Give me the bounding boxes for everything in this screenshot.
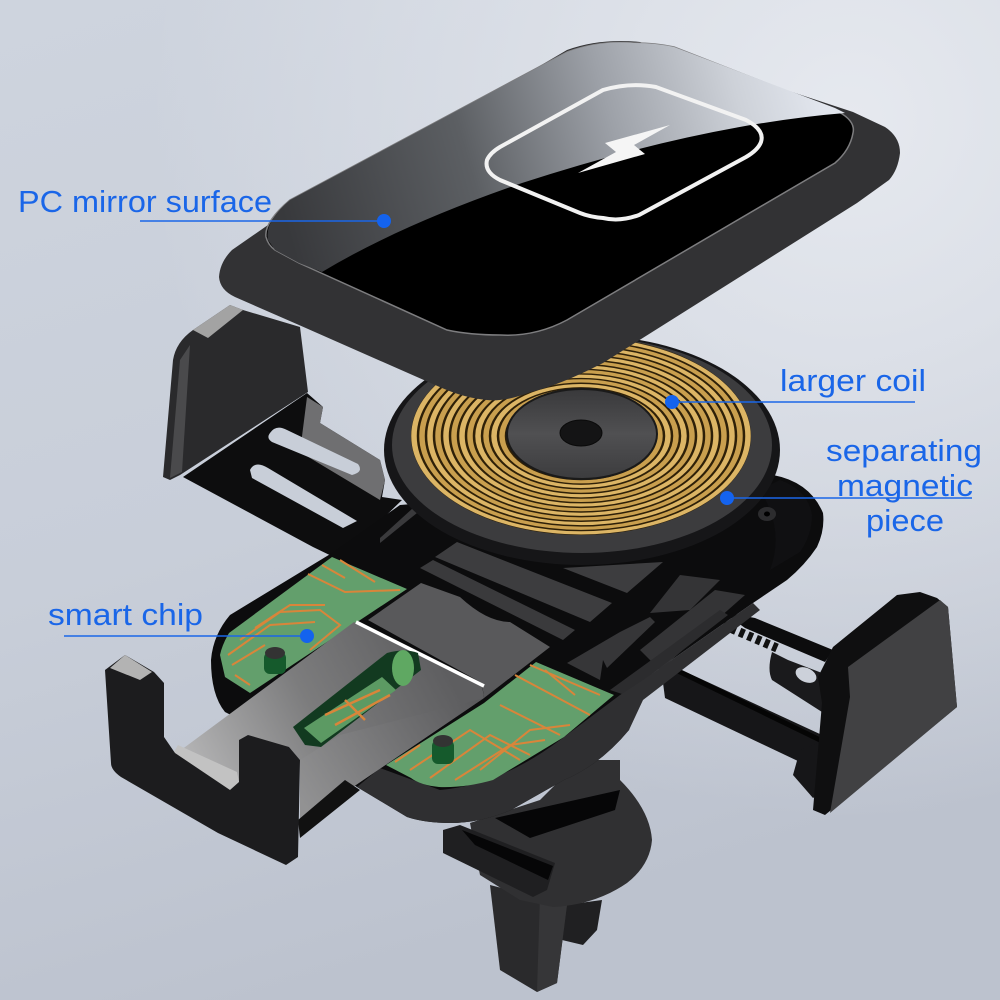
circuit board right <box>386 662 614 787</box>
label: larger coil <box>665 363 926 409</box>
copper coil <box>411 337 751 535</box>
label: larger coil: larger coil <box>780 363 926 398</box>
right clamp pad <box>813 592 957 815</box>
vent clip <box>443 760 652 992</box>
magnetic disk <box>384 335 780 565</box>
right clamp rails <box>660 612 833 798</box>
circuit board left <box>220 557 407 693</box>
label: separating magnetic piece: piece <box>866 503 944 538</box>
steel plate and front clamp <box>105 583 550 865</box>
label: separating magnetic piece <box>720 433 982 538</box>
top mirror plate <box>219 41 900 400</box>
label: smart chip <box>48 597 314 643</box>
label: PC mirror surface: PC mirror surface <box>18 184 272 219</box>
charging square icon <box>487 85 762 219</box>
label: smart chip: smart chip <box>48 597 203 632</box>
mirror reflection <box>267 42 845 272</box>
main body shell <box>211 475 823 823</box>
label: PC mirror surface <box>18 184 391 228</box>
upper-left clamp arm <box>163 305 402 560</box>
inner tray panels <box>435 542 612 622</box>
lightning bolt <box>578 125 670 173</box>
mirror surface <box>266 42 853 335</box>
label: separating magnetic piece: separating <box>826 433 982 468</box>
label: separating magnetic piece: magnetic <box>837 468 973 503</box>
